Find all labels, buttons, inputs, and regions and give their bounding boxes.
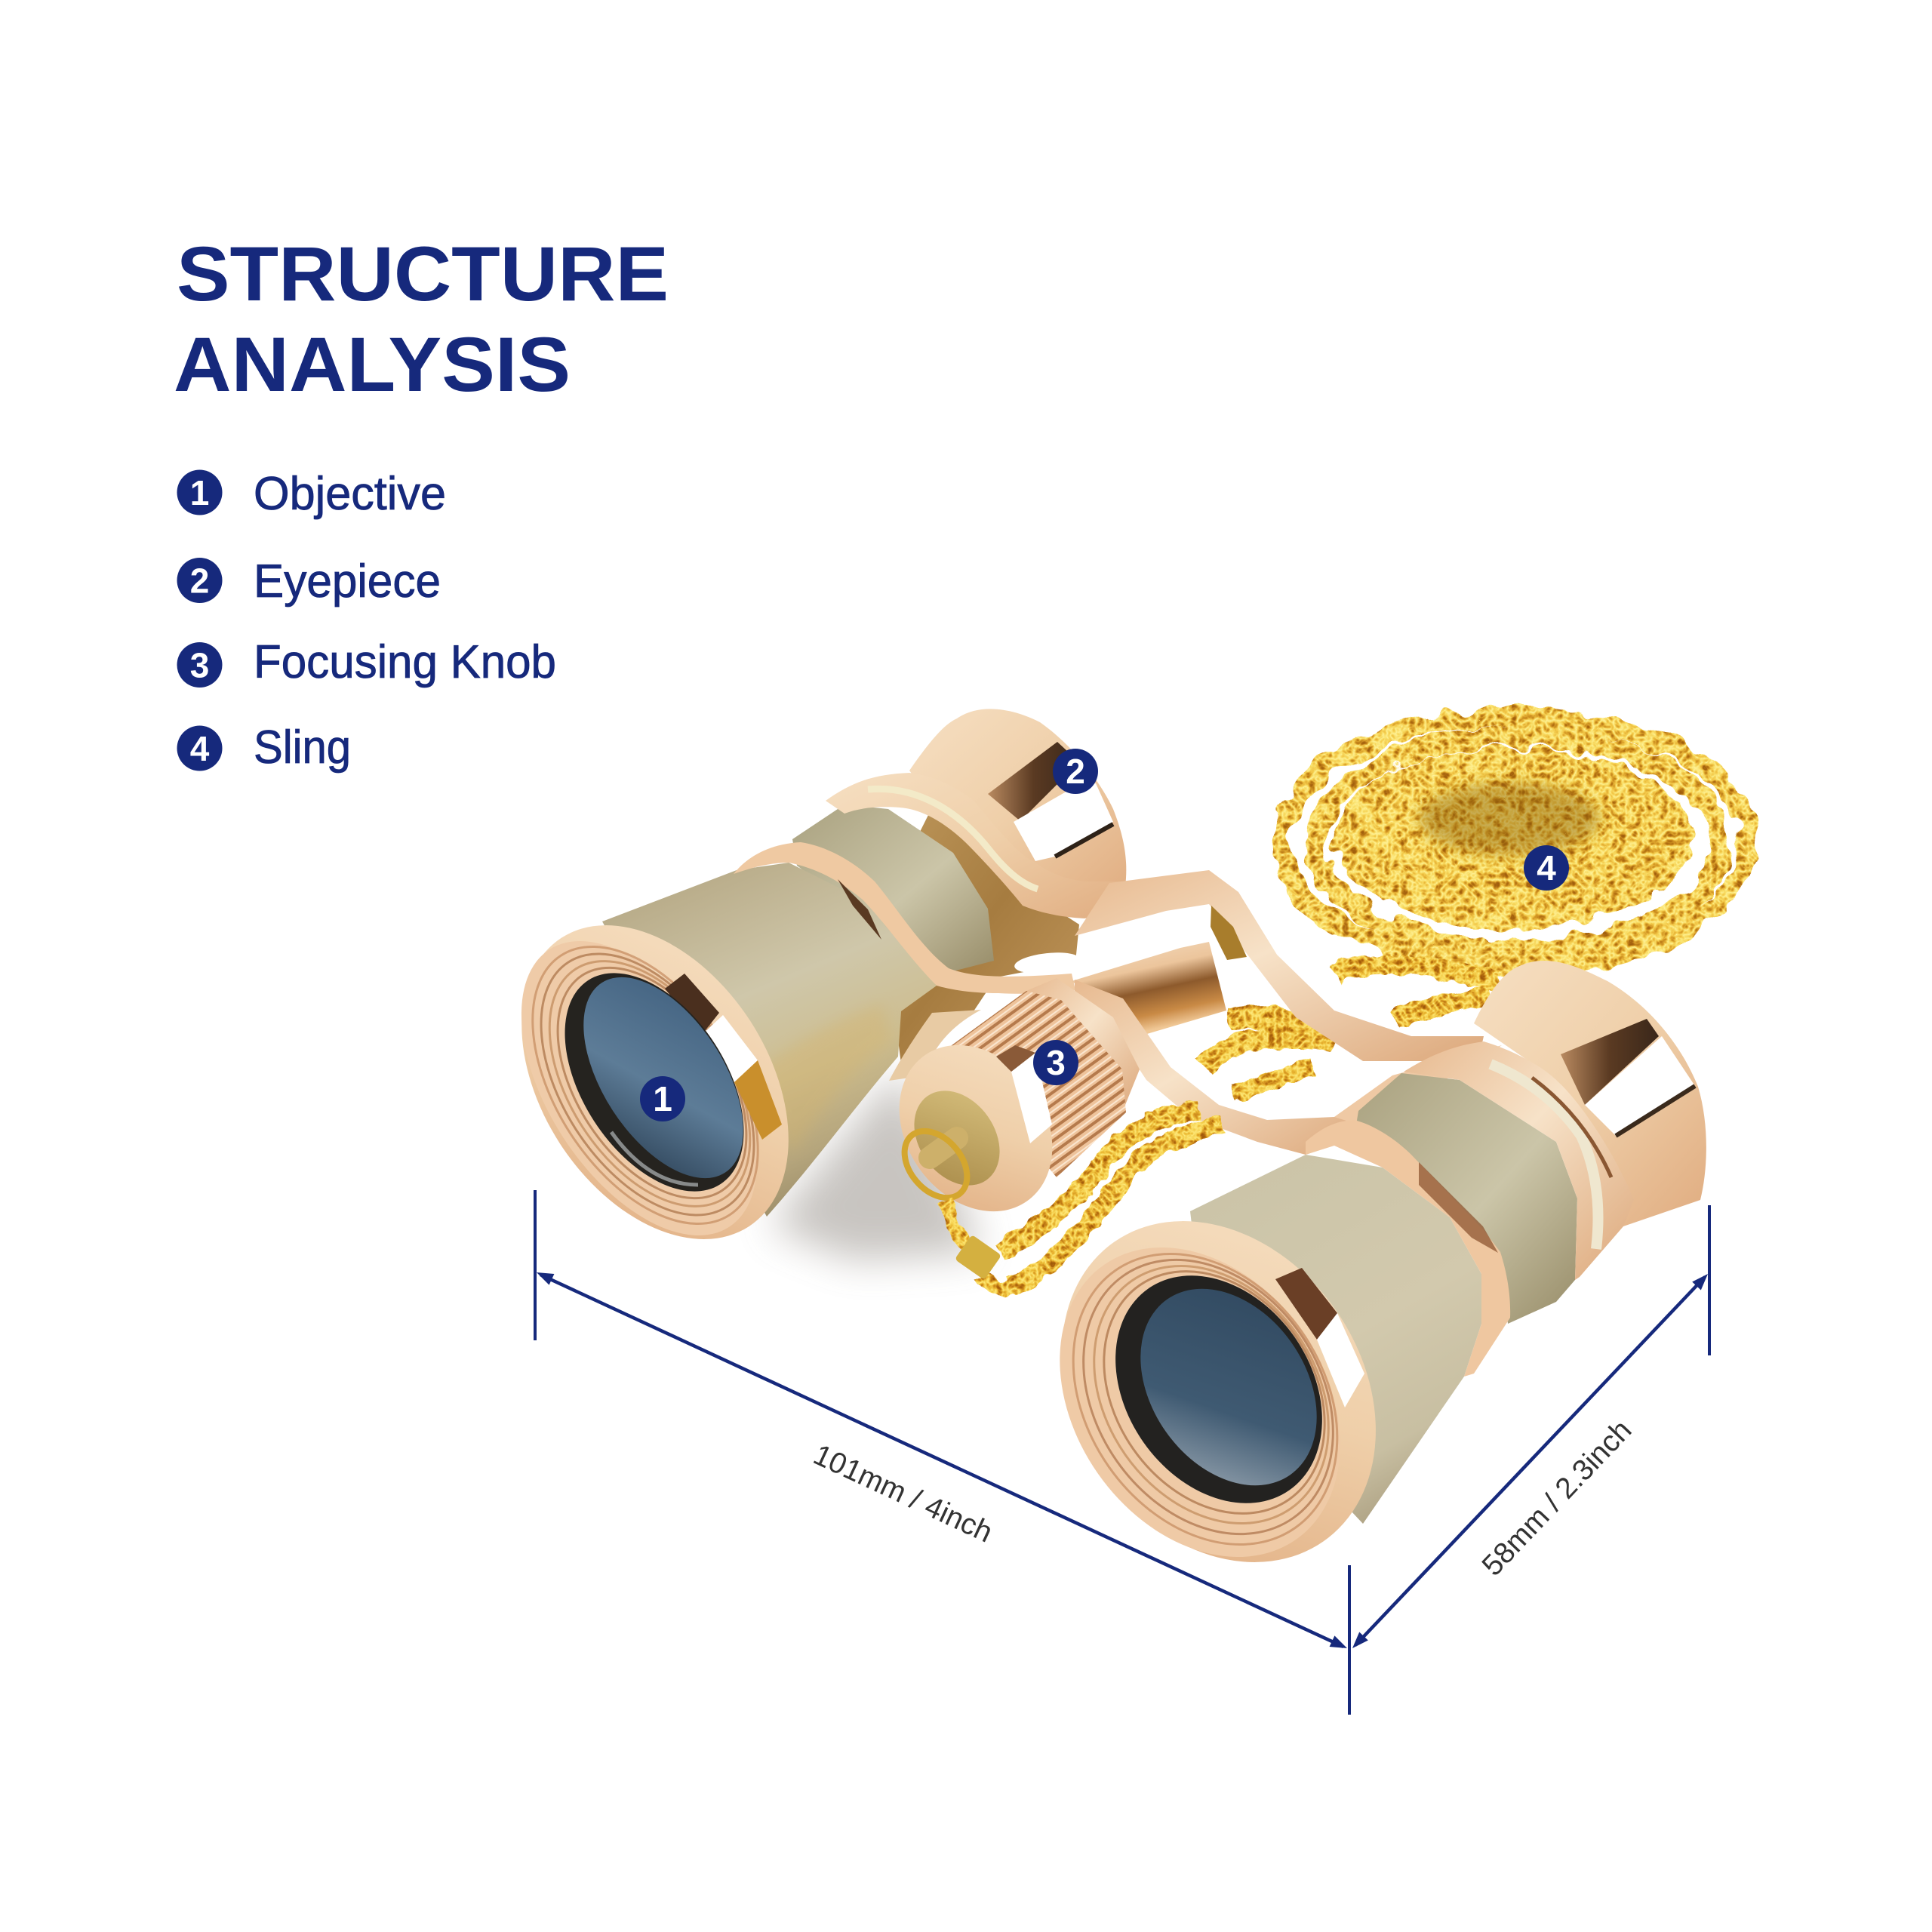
legend item 3: Focusing Knob: Focusing Knob — [254, 636, 556, 688]
left bridge lobe — [889, 1010, 981, 1081]
callout badge 3: 3 — [1046, 1043, 1066, 1082]
right objective lens — [1073, 1236, 1364, 1543]
legend item 4: Sling: Sling — [254, 721, 351, 774]
knob collar — [1026, 978, 1140, 1112]
right eyepiece rings — [1404, 1041, 1634, 1280]
left objective front face ridges — [473, 900, 805, 1276]
focusing knob — [868, 978, 1140, 1241]
left eyepiece — [909, 709, 1126, 906]
bridge arm lower — [1075, 980, 1366, 1155]
dimension: length: 101mm / 4inch — [808, 1438, 997, 1549]
left eyepiece ring and upper arm — [826, 773, 1132, 918]
left rim reflections — [665, 974, 782, 1140]
title — [174, 231, 669, 408]
right objective front face ridges — [1002, 1194, 1398, 1611]
ground shadow — [770, 1072, 981, 1260]
chain strands to knob — [943, 1109, 1223, 1288]
legend item 2: Eyepiece — [177, 555, 441, 608]
callout badge 2: 2 — [1066, 752, 1085, 791]
right binocular barrel — [997, 961, 1706, 1623]
legend item 2: Eyepiece: 2 — [190, 561, 209, 601]
legend item 1: Objective: 1 — [190, 473, 209, 512]
legend item 2: Eyepiece: Eyepiece — [254, 555, 441, 608]
dimension: width — [1352, 1205, 1709, 1648]
legend item 1: Objective: Objective — [254, 468, 446, 520]
right bridge wedge — [1334, 1045, 1502, 1124]
hinge detail — [1211, 906, 1247, 960]
left binocular barrel — [466, 709, 1132, 1288]
left objective housing — [466, 876, 844, 1288]
title: ANALYSIS — [174, 321, 571, 408]
callout badge 3 — [1033, 1040, 1078, 1085]
right eyepiece — [1474, 961, 1706, 1226]
title: STRUCTURE — [177, 231, 669, 317]
right barrel cone — [1190, 1155, 1481, 1524]
bridge arm upper — [1075, 870, 1484, 1061]
pin — [930, 1138, 957, 1158]
legend item 3: Focusing Knob: 3 — [190, 646, 209, 685]
bridge tube — [1072, 942, 1226, 1035]
right mid barrel — [1354, 1073, 1577, 1324]
callout badge 2 — [1053, 749, 1098, 794]
left bridge bronze — [868, 800, 1079, 1075]
chain strands behind arms — [1204, 1017, 1336, 1092]
chain coil (sling) — [1281, 716, 1749, 1020]
callout badge 1: 1 — [653, 1079, 672, 1118]
dimension: length — [535, 1190, 1349, 1715]
knurled wheel — [949, 991, 1126, 1177]
brass disc — [897, 1075, 1017, 1201]
left objective lens — [528, 941, 780, 1223]
gap in bridge — [1014, 949, 1081, 977]
left barrel cone — [602, 863, 937, 1217]
padlock — [955, 1235, 1001, 1280]
coil dark centre — [1419, 783, 1600, 855]
legend list — [177, 468, 556, 774]
right objective housing — [997, 1160, 1441, 1623]
callout badge 4 — [1524, 845, 1569, 891]
callout badge 4: 4 — [1537, 848, 1556, 888]
left mid barrel — [792, 804, 994, 974]
knob end cap — [868, 1016, 1084, 1241]
left middle ring — [734, 842, 1075, 994]
right rim reflections — [1275, 1268, 1364, 1407]
dimension: width: 58mm / 2.3inch — [1476, 1414, 1638, 1583]
right middle ring — [1306, 1120, 1510, 1377]
ring — [892, 1119, 980, 1210]
legend item 4: Sling: 4 — [190, 729, 210, 768]
legend item 4: Sling — [177, 721, 351, 774]
callout badge 1 — [640, 1076, 685, 1121]
chain links running to the eyepiece — [1334, 964, 1498, 1020]
